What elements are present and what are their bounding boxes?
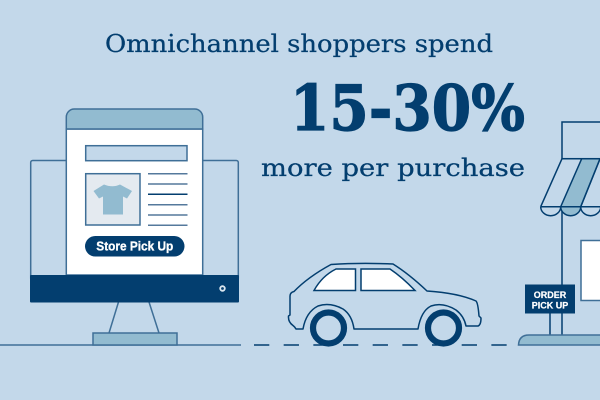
road dashes: [254, 344, 507, 346]
heading: intro line: Omnichannel shoppers spend: [105, 30, 493, 58]
icon: desktop monitor: [30, 109, 239, 345]
store sign board: [562, 122, 600, 159]
button: store pick up: [85, 236, 184, 256]
car rear window: [314, 269, 356, 290]
icon: storefront: [518, 122, 600, 345]
awning shaded stripe: [561, 159, 600, 207]
store pole: [561, 206, 563, 335]
button: store pick up: Store Pick Up: [96, 240, 174, 254]
monitor chin: [30, 275, 239, 302]
browser window: [66, 109, 203, 275]
browser title bar: [66, 109, 203, 129]
car rear wheel: [313, 312, 344, 344]
search box: [86, 146, 187, 161]
sign: order pick up: [525, 284, 575, 314]
icon: car: [288, 263, 481, 344]
product description lines: [148, 174, 188, 225]
car front wheel: [428, 312, 459, 344]
heading: closing line: more per purchase: [261, 154, 525, 182]
store window: [581, 240, 600, 300]
sign posts: [549, 313, 551, 335]
awning: [541, 159, 600, 216]
monitor base: [93, 333, 177, 345]
power button: [220, 286, 225, 291]
awning scallops: [541, 207, 600, 216]
monitor neck: [109, 302, 159, 333]
product image: [86, 174, 140, 225]
sign: order pick up: ORDER: [534, 290, 567, 300]
sign: order pick up: PICK UP: [532, 300, 568, 310]
car front window: [361, 269, 415, 290]
ground line: [0, 344, 241, 346]
monitor frame: [31, 160, 238, 280]
car body: [288, 263, 481, 329]
heading: big statistic: 15-30%: [290, 71, 525, 145]
icon: t-shirt: [94, 184, 132, 214]
store floor: [518, 335, 600, 345]
